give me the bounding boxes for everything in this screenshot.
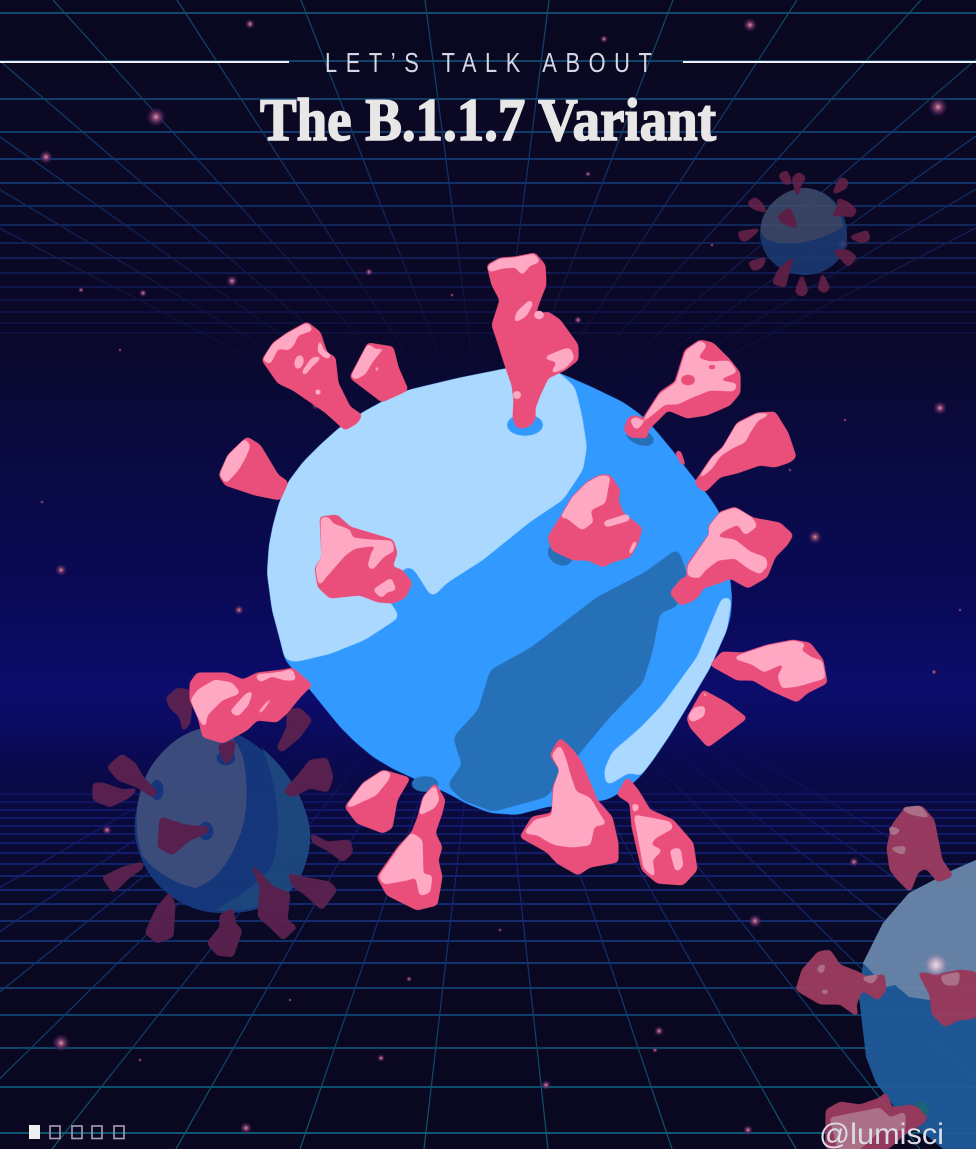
- kicker text: LET’S TALK ABOUT: [325, 47, 652, 79]
- body: [267, 366, 732, 815]
- spike: left: [219, 437, 288, 500]
- spike: bottom center: [520, 738, 618, 875]
- light lower-right crescent: [604, 597, 732, 787]
- spike: bottom left: [377, 783, 445, 910]
- spike: far left overlapping small virus: [190, 668, 312, 743]
- spike: right upper: [675, 412, 796, 492]
- spike: on body left: [315, 515, 412, 603]
- spike: right lower: [710, 640, 827, 702]
- spike: upper right: [624, 340, 740, 438]
- pager: inactive squares: [50, 1126, 124, 1138]
- spike: right bottom: [687, 690, 747, 747]
- stalk sockets: [506, 414, 544, 436]
- small virus: lower left: [93, 688, 353, 957]
- small virus: lower right: [796, 806, 976, 1149]
- spikes: main virus: [190, 253, 827, 910]
- top rule right: [683, 61, 976, 63]
- spike: bottom far left: [345, 770, 410, 833]
- upper perspective grid: [0, 0, 976, 480]
- pager: active square: [29, 1125, 40, 1139]
- main virus: [267, 366, 732, 815]
- spike: right large: [670, 507, 793, 605]
- light upper-left region: [267, 366, 587, 662]
- spike: top: [487, 253, 578, 428]
- lower perspective grid: [0, 600, 976, 1149]
- dark shaded region: [447, 548, 687, 812]
- spike: bottom right: [617, 777, 697, 885]
- spike: on body right: [548, 475, 642, 567]
- spike: upper left large: [262, 322, 362, 430]
- title: The B.1.1.7 Variant: [260, 87, 716, 153]
- top rule left: [0, 61, 289, 63]
- spike: upper left small: [350, 343, 408, 402]
- small virus: upper right: [737, 170, 870, 297]
- star over lower-right virus: [924, 953, 948, 977]
